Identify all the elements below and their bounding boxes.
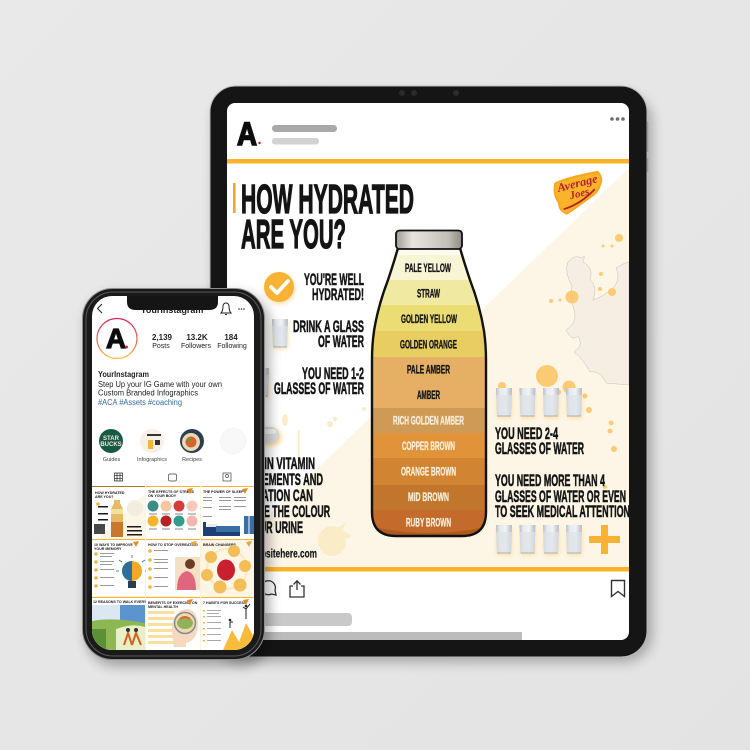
highlight: recipes: Recipes (182, 457, 202, 463)
level: more than 4 glasses (495, 472, 630, 555)
profile bio (98, 370, 222, 407)
scroll bar (227, 632, 522, 640)
infographic artwork (215, 168, 630, 567)
Average Joes logo (554, 170, 602, 215)
highlight: infographics: Infographics (137, 457, 167, 463)
profile stats: 184 (224, 333, 238, 342)
colour labels: GOLDEN YELLOW (401, 314, 457, 326)
colour labels (393, 263, 464, 530)
bottle outline (372, 248, 486, 536)
tablet cameras (399, 90, 459, 96)
phone shadow (86, 294, 270, 666)
label: HYDRATED! (312, 286, 364, 304)
Average Joes logo: Average (555, 171, 600, 195)
bottle halo (372, 248, 486, 536)
thumb: brain changers: BRAIN CHANGERS (203, 543, 237, 547)
label (494, 427, 584, 454)
colour labels: STRAW (417, 288, 440, 300)
yellow bottom rule (227, 567, 629, 572)
thumb: sleep (201, 486, 254, 539)
more options dots (610, 117, 625, 121)
story highlights (99, 428, 246, 463)
grid background (92, 486, 254, 652)
profile bio: Custom Branded Infographics (98, 388, 198, 398)
thumb: habits: 7 HABITS FOR SUCCESS (203, 601, 247, 605)
thumb: hydration (92, 486, 145, 539)
colour labels: COPPER BROWN (402, 441, 455, 453)
label: YOU NEED MORE THAN 4 (495, 472, 605, 490)
profile bio: YourInstagram (98, 370, 149, 379)
highlight: guides (99, 429, 123, 463)
colour labels: PALE AMBER (407, 364, 450, 376)
highlight: guides: STAR (103, 436, 120, 442)
colour labels: PALE YELLOW (405, 263, 451, 275)
note about vitamins (265, 457, 330, 534)
tablet side buttons (646, 122, 648, 172)
icon: bell (221, 303, 231, 314)
paint splatter (498, 234, 623, 489)
post header logo: A (237, 116, 257, 152)
world map watermark (566, 256, 629, 385)
note about vitamins: MEDICATION CAN (232, 487, 313, 505)
highlight: recipes (180, 429, 204, 463)
bottle (370, 230, 490, 540)
thumb: stress: THE EFFECTS OF STRESS (148, 490, 195, 494)
tablet shadow (214, 94, 652, 662)
yellow top rule (227, 159, 629, 164)
colour labels: GOLDEN ORANGE (400, 340, 457, 352)
caption placeholder (240, 613, 352, 626)
level: 2-4 glasses (495, 388, 584, 458)
thumb: memory (92, 539, 148, 596)
thumb: stress: ON YOUR BODY (148, 494, 177, 498)
tablet body (210, 86, 647, 657)
label: TO SEEK MEDICAL ATTENTION (495, 503, 630, 521)
title: ARE YOU? (241, 211, 346, 257)
label: YOU NEED 1-2 (302, 365, 364, 383)
title accent bar (233, 183, 236, 213)
level: drink a glass (272, 318, 364, 351)
label (494, 474, 629, 518)
level: 1-2 glasses (253, 365, 364, 398)
icon: back chevron (98, 304, 102, 313)
profile bio: Step Up your IG Game with your own (98, 380, 222, 389)
thumb: brain changers (201, 539, 254, 596)
thumb: habits (201, 597, 254, 650)
label: GLASSES OF WATER (495, 440, 584, 458)
thumb: hydration: ARE YOU? (95, 495, 114, 499)
tablet (210, 86, 652, 662)
icon: four glasses (496, 388, 582, 418)
urine colour bands (370, 245, 490, 540)
website: yourwebsitehere.com (232, 548, 317, 560)
highlight: infographics (137, 429, 167, 463)
highlight: empty (220, 428, 246, 454)
thumb: hydration: HOW HYDRATED (95, 491, 125, 495)
thumb: exercise mental health: BENEFITS OF EXERCISE ON (148, 601, 198, 605)
colour labels: MID BROWN (408, 492, 449, 504)
profile stats: Following (217, 343, 247, 350)
label (293, 320, 364, 348)
bottle cap (396, 230, 462, 249)
profile handle: YourInstagram (141, 305, 203, 315)
post header name placeholders (272, 125, 337, 144)
icon: check badge (264, 272, 295, 304)
level: well hydrated (264, 271, 364, 304)
icon: glass (272, 319, 288, 349)
thumb: walking (92, 597, 155, 650)
instagram post (215, 116, 630, 640)
more dots (238, 308, 245, 310)
profile bio: #ACA #Assets #coaching (98, 398, 182, 407)
tablet screen (227, 103, 629, 640)
profile stats: Posts (152, 343, 170, 350)
note about vitamins: OF YOUR URINE (232, 519, 303, 537)
thumb: overeating (146, 539, 200, 596)
Average Joes logo: Joes (567, 186, 591, 202)
label: GLASSES OF WATER (274, 380, 364, 398)
phone screen (92, 296, 254, 650)
phone body (82, 288, 264, 660)
thumb: stress (146, 486, 200, 539)
title: HOW HYDRATED (241, 176, 414, 222)
lower-left pale splatter (282, 407, 366, 556)
icon: bookmark (612, 580, 624, 596)
thumb: exercise mental health: MENTAL HEALTH (148, 605, 178, 609)
label: GLASSES OF WATER OR EVEN (495, 488, 626, 506)
highlight: guides: BUCKS (100, 442, 122, 448)
phone inner edge (86, 292, 261, 656)
label (274, 367, 364, 394)
label: OF WATER (318, 333, 364, 351)
label: YOU NEED 2-4 (495, 425, 558, 443)
colour labels: AMBER (417, 390, 440, 402)
thumb: memory: YOUR MEMORY (94, 547, 122, 551)
profile tab icons (114, 473, 231, 481)
note about vitamins: SUPPLEMENTS AND (232, 471, 323, 489)
icon: share (290, 581, 304, 597)
icon: pill (265, 426, 284, 448)
icon: glasses (265, 368, 272, 400)
profile stats: 13.2K (186, 333, 208, 342)
icon: comment (261, 581, 276, 595)
icon: plus (589, 525, 620, 554)
cream diagonal background (265, 168, 629, 567)
phone (82, 288, 270, 666)
profile avatar (97, 318, 137, 358)
note about vitamins: CERTAIN VITAMIN (232, 455, 315, 473)
note about vitamins: CHANGE THE COLOUR (232, 503, 330, 521)
thumb: memory: 10 WAYS TO IMPROVE (94, 543, 133, 547)
colour labels: ORANGE BROWN (401, 466, 456, 478)
notch (127, 294, 218, 310)
thumb: sleep: THE POWER OF SLEEP (203, 490, 244, 494)
thumb: overeating: HOW TO STOP OVEREATING (148, 543, 198, 547)
colour labels: RUBY BROWN (406, 518, 451, 530)
highlight: guides: Guides (103, 457, 120, 463)
title (241, 184, 414, 250)
label (304, 273, 364, 300)
profile stats: 2,139 (152, 333, 173, 342)
icon: four glasses (496, 525, 582, 555)
label: DRINK A GLASS (293, 318, 364, 336)
profile stats (152, 333, 247, 350)
colour labels: RICH GOLDEN AMBER (393, 416, 464, 428)
label: YOU'RE WELL (304, 271, 364, 289)
post grid (92, 486, 254, 652)
thumb: exercise mental health (146, 597, 200, 650)
profile stats: Followers (181, 343, 211, 350)
thumb: walking: 12 REASONS TO WALK EVERY DAY (93, 600, 155, 604)
post header logo (236, 122, 261, 146)
profile avatar: A (106, 323, 126, 354)
